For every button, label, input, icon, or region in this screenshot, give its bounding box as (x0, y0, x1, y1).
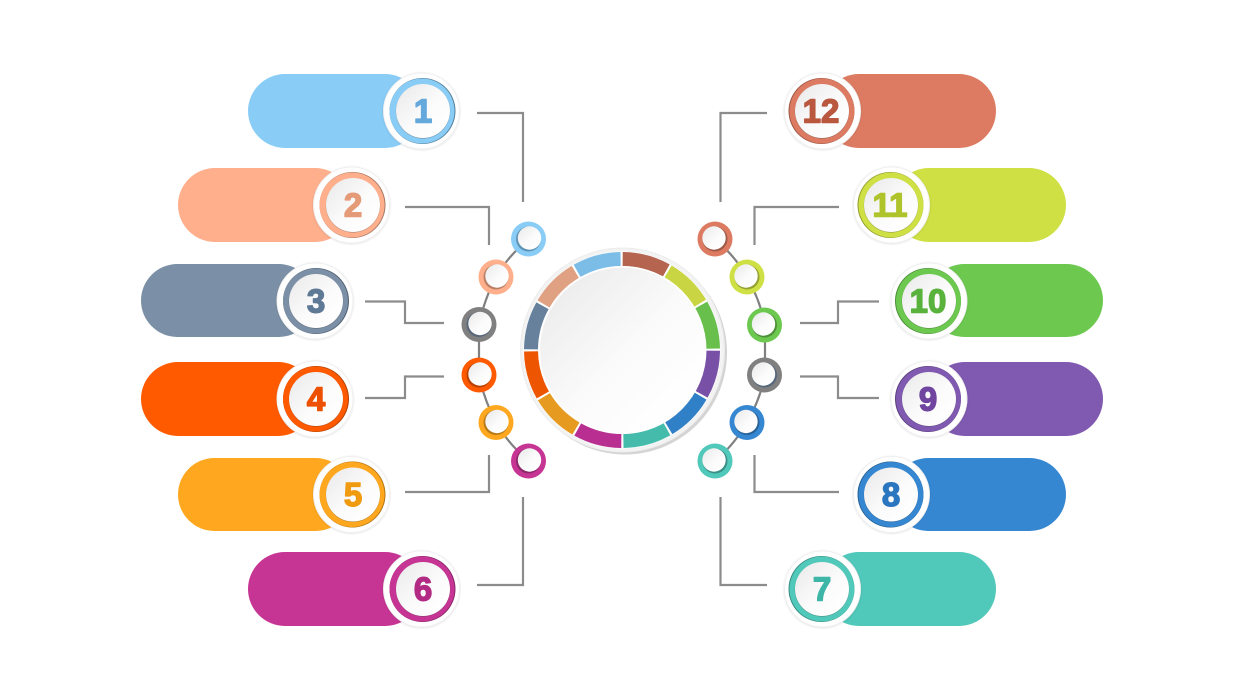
pill 8 (854, 456, 1066, 532)
pill 11: 11 (873, 186, 907, 224)
node 2 (478, 260, 514, 294)
pill 5: 5 (344, 476, 362, 513)
node 5 (478, 405, 514, 440)
node 11 (730, 260, 764, 294)
connector: step 5 (405, 455, 489, 492)
connector: step 9 (800, 376, 879, 398)
node 7 (698, 444, 732, 478)
pill 3 (141, 263, 353, 339)
center dial (497, 225, 747, 475)
connector: step 4 (365, 376, 444, 398)
connector: step 6 (477, 497, 523, 585)
connector: step 7 (720, 497, 767, 585)
pill 7 (784, 551, 996, 627)
connector: step 3 (365, 302, 444, 323)
pill 12: 12 (803, 92, 839, 130)
connector: step 2 (405, 207, 489, 245)
pill 4: 4 (307, 380, 326, 418)
pill 4 (141, 361, 353, 437)
connector: step 10 (800, 302, 879, 323)
pill 2: 2 (344, 186, 362, 224)
node 9 (747, 358, 782, 392)
node 4 (462, 358, 496, 392)
pill 3: 3 (307, 282, 325, 320)
pill 5 (178, 456, 390, 532)
connector: step 12 (720, 113, 767, 202)
pill 6 (248, 551, 460, 627)
pill 8: 8 (882, 476, 900, 513)
left chain link lines (479, 239, 529, 461)
node 12 (698, 222, 732, 256)
pill 2 (178, 167, 390, 243)
pill 9: 9 (919, 380, 937, 418)
right chain link lines (715, 239, 765, 461)
pill 10 (891, 263, 1103, 339)
node 6 (511, 444, 546, 478)
connector: step 1 (477, 113, 523, 202)
connector: step 8 (754, 455, 839, 492)
pill 7: 7 (813, 570, 831, 608)
node 8 (730, 405, 764, 440)
node 10 (747, 308, 782, 342)
connector: step 11 (754, 207, 839, 245)
pill 12 (784, 73, 996, 149)
pill 6: 6 (414, 570, 432, 608)
pill 11 (854, 167, 1066, 243)
pill 1 (248, 73, 460, 149)
pill 1: 1 (414, 92, 432, 130)
pill 10: 10 (910, 282, 946, 320)
node 3 (462, 307, 496, 342)
pill 9 (891, 361, 1103, 437)
node 1 (511, 222, 546, 256)
